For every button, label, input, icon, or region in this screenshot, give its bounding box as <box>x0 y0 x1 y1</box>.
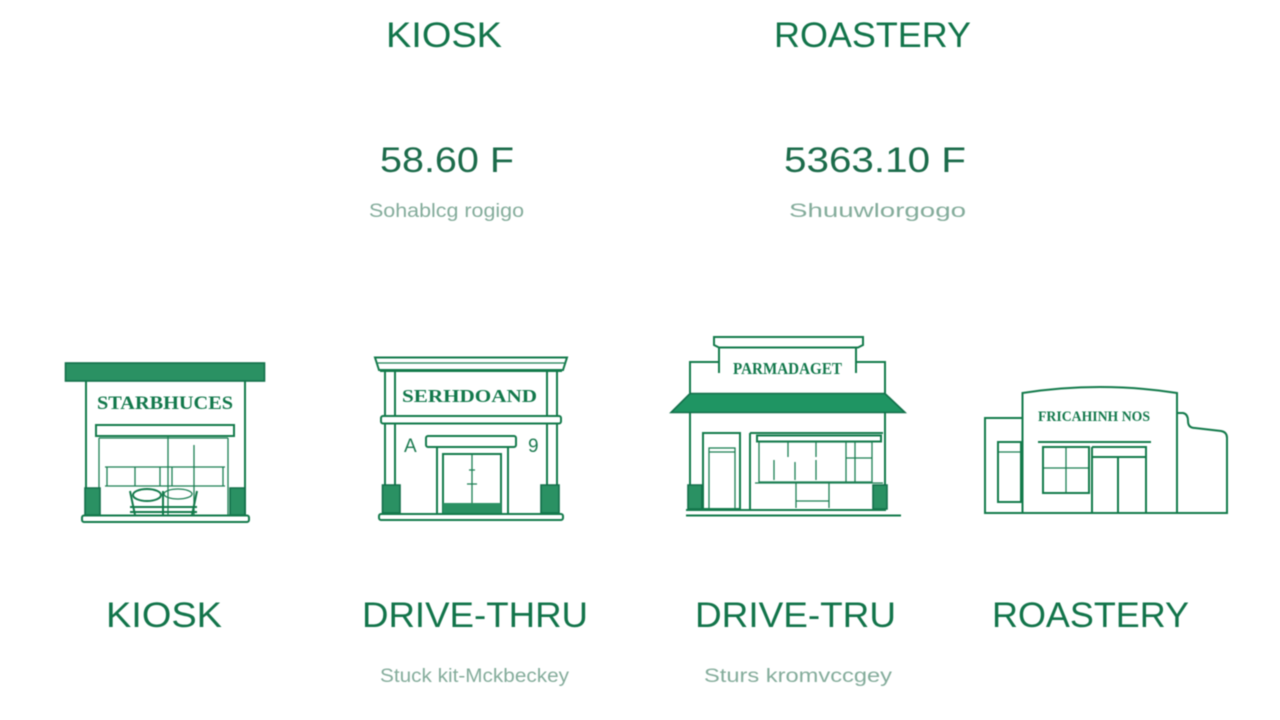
roastery canopy <box>1038 441 1151 443</box>
stat value: roastery: 5363.10 F <box>784 141 966 180</box>
bottom label: drive-thru: DRIVE-THRU <box>362 596 588 635</box>
roastery left annex <box>985 418 1022 513</box>
kiosk walls <box>86 381 245 515</box>
drive-thru band <box>381 416 561 424</box>
roastery door <box>1092 447 1146 512</box>
drive-thru sign: SERHDOAND <box>402 386 537 406</box>
drive-thru cornice inner line <box>377 362 565 364</box>
drive-tru awning <box>671 394 905 412</box>
drive-thru wall mark right: 9 <box>528 436 539 457</box>
drive-tru sign: PARMADAGET <box>733 359 843 378</box>
drive-thru pillar bases <box>382 485 559 513</box>
top heading: roastery: ROASTERY <box>774 16 971 55</box>
drive-tru pillar bases <box>688 485 887 509</box>
stat caption: roastery: Shuuwlorgogo <box>789 201 966 222</box>
drive-tru door <box>703 433 740 509</box>
roastery window <box>1043 447 1089 493</box>
roastery main building <box>1022 387 1177 513</box>
kiosk pillar bases <box>85 488 245 515</box>
roastery ground line <box>984 512 1228 514</box>
kiosk awning <box>96 425 234 436</box>
drive-thru columns <box>380 371 562 486</box>
kiosk roof <box>66 363 264 381</box>
bottom label: roastery: ROASTERY <box>992 596 1189 635</box>
kiosk window frames <box>99 436 228 515</box>
drive-thru door canopy <box>426 436 516 447</box>
bottom label: kiosk: KIOSK <box>106 596 222 635</box>
drive-tru parapet <box>690 348 885 393</box>
drive-thru wall mark left: A <box>404 436 417 457</box>
icon: drive-tru storefront <box>671 337 905 516</box>
roastery annex window <box>998 442 1021 502</box>
stat value: kiosk: 58.60 F <box>380 141 514 180</box>
icon: drive-thru storefront <box>375 358 567 520</box>
drive-thru ground <box>379 514 563 520</box>
drive-tru window <box>750 433 883 509</box>
icon: kiosk storefront <box>66 363 264 522</box>
drive-thru cornice <box>375 358 567 370</box>
icon: roastery storefront <box>984 387 1228 513</box>
bottom label: drive-tru: DRIVE-TRU <box>695 596 896 635</box>
bottom caption: drive-thru: Stuck kit-Mckbeckey <box>380 666 570 687</box>
kiosk planters <box>130 489 197 517</box>
drive-tru top cap <box>714 337 863 348</box>
drive-tru walls <box>690 413 885 510</box>
roastery right annex <box>1177 413 1227 513</box>
drive-tru ground <box>686 510 901 516</box>
stat caption: kiosk: Sohablcg rogigo <box>369 201 524 222</box>
kiosk sign: STARBHUCES <box>97 393 233 414</box>
top heading: kiosk: KIOSK <box>386 16 502 55</box>
bottom caption: drive-tru: Sturs kromvccgey <box>704 666 893 687</box>
drive-thru door <box>437 447 508 513</box>
kiosk ground <box>82 516 249 522</box>
roastery sign: FRICAHINH NOS <box>1038 409 1150 425</box>
